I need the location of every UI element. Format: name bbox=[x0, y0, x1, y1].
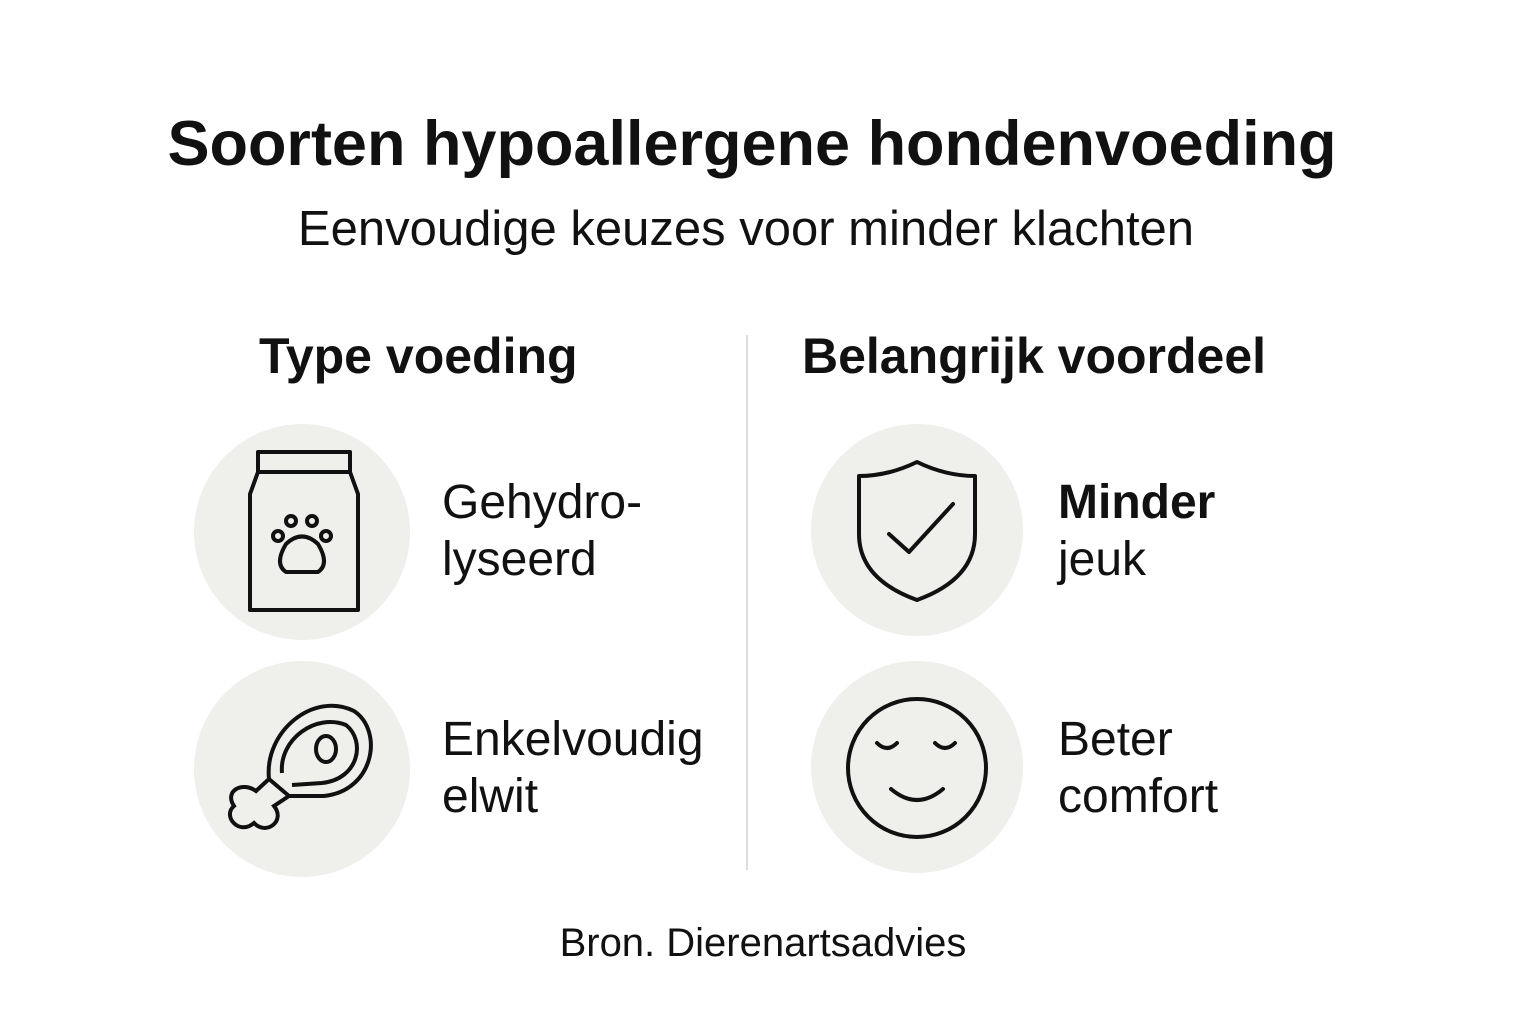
text: enkelvoudig elwit: elwit bbox=[442, 770, 538, 823]
text: minder jeuk: Minder bbox=[1058, 476, 1215, 529]
footer source: Bron. Dierenartsadvies bbox=[560, 921, 966, 965]
subtitle: Eenvoudige keuzes voor minder klachten bbox=[298, 202, 1194, 256]
icon: shield bbox=[811, 424, 1023, 636]
icon: smiley bbox=[811, 661, 1023, 873]
icon: meat bbox=[194, 661, 410, 877]
text: minder jeuk bbox=[1056, 476, 1215, 586]
text: gehydrolyseerd: Gehydro- bbox=[442, 476, 642, 529]
text: enkelvoudig elwit: Enkelvoudig bbox=[442, 713, 704, 766]
icon: food bag bbox=[194, 424, 410, 640]
text: beter comfort: comfort bbox=[1058, 770, 1218, 823]
text: beter comfort bbox=[1058, 713, 1218, 823]
text: beter comfort: Beter bbox=[1058, 713, 1173, 766]
heading: belangrijk voordeel: Belangrijk voordeel bbox=[802, 328, 1266, 384]
text: gehydrolyseerd bbox=[442, 476, 642, 586]
title: Soorten hypoallergene hondenvoeding bbox=[167, 109, 1337, 179]
text: minder jeuk: jeuk bbox=[1058, 533, 1146, 586]
text: enkelvoudig elwit bbox=[442, 713, 704, 823]
text: gehydrolyseerd: lyseerd bbox=[442, 533, 597, 586]
heading: type voeding: Type voeding bbox=[259, 328, 578, 384]
